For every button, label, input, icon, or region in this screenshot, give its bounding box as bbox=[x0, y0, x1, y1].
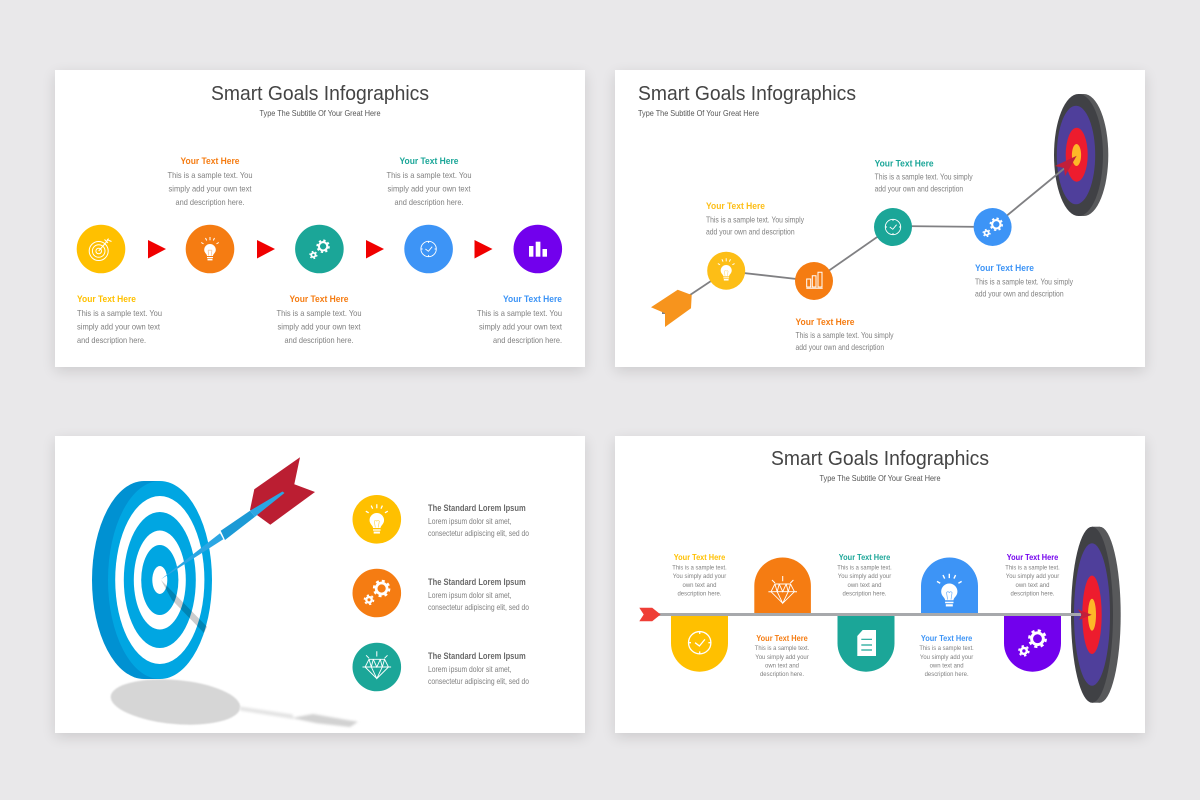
text block: step 1 bbox=[77, 294, 162, 345]
text block: step 5: Your Text Here bbox=[503, 294, 562, 304]
list text 3: Lorem ipsum dolor sit amet, bbox=[428, 665, 512, 674]
text block: blue: This is a sample text. bbox=[919, 645, 974, 652]
text block: step 5 bbox=[477, 294, 563, 345]
text block: item 1: This is a sample text. You simply bbox=[706, 216, 805, 224]
text block: teal: own text and bbox=[848, 582, 882, 589]
text block: purple: Your Text Here bbox=[1007, 553, 1059, 562]
text block: step 4: Your Text Here bbox=[400, 156, 459, 166]
text block: item 3 bbox=[875, 158, 973, 194]
text block: teal: description here. bbox=[842, 590, 887, 597]
text block: blue: own text and bbox=[930, 662, 964, 670]
text block: yellow bbox=[672, 553, 727, 597]
subtitle: Type The Subtitle Of Your Great Here bbox=[638, 109, 759, 118]
text block: step 3: simply add your own text bbox=[278, 322, 361, 332]
text block: blue: Your Text Here bbox=[921, 634, 973, 643]
tab: orange diamond bbox=[754, 557, 811, 614]
text block: teal bbox=[837, 553, 892, 597]
list text 2: consectetur adipiscing elit, sed do bbox=[428, 603, 529, 612]
text block: step 1: simply add your own text bbox=[77, 322, 161, 332]
text block: item 4: This is a sample text. You simply bbox=[975, 277, 1074, 286]
text block: item 2 bbox=[796, 317, 894, 352]
text block: teal: Your Text Here bbox=[839, 553, 891, 562]
blue target board bbox=[92, 481, 212, 679]
text block: purple: You simply add your bbox=[1006, 573, 1060, 580]
title: Smart Goals Infographics bbox=[211, 83, 429, 105]
list text 2: The Standard Lorem Ipsum bbox=[428, 577, 526, 587]
panel: blue target with dart and list bbox=[55, 436, 585, 737]
text block: step 2: This is a sample text. You bbox=[168, 171, 253, 180]
step 5 circle: bar chart icon bbox=[514, 225, 562, 273]
text block: yellow: This is a sample text. bbox=[672, 565, 727, 572]
dart head bbox=[1078, 609, 1092, 620]
text block: item 4: Your Text Here bbox=[975, 263, 1034, 273]
arrow fletching bbox=[651, 290, 692, 327]
text block: purple: own text and bbox=[1016, 582, 1050, 589]
text block: step 2: simply add your own text bbox=[168, 184, 252, 194]
tab: yellow clock bbox=[671, 614, 728, 672]
text block: step 3: Your Text Here bbox=[290, 294, 349, 304]
list text 1: consectetur adipiscing elit, sed do bbox=[428, 529, 529, 538]
text block: step 3: and description here. bbox=[284, 336, 354, 345]
text block: item 3: add your own and description bbox=[875, 185, 964, 194]
arrow fletching bbox=[639, 608, 661, 621]
arrow 3 bbox=[366, 240, 384, 258]
text block: step 1: Your Text Here bbox=[77, 294, 136, 304]
tab: blue bulb bbox=[921, 558, 978, 614]
panel: five step horizontal process bbox=[55, 70, 585, 371]
tab: teal document bbox=[838, 614, 894, 672]
text block: purple bbox=[1005, 553, 1060, 597]
text block: purple: This is a sample text. bbox=[1005, 565, 1060, 572]
text block: item 2: Your Text Here bbox=[796, 317, 855, 327]
list text 3: The Standard Lorem Ipsum bbox=[428, 651, 526, 661]
arrow 4 bbox=[474, 240, 492, 258]
list item 1 icon: bulb bbox=[352, 495, 401, 544]
text block: step 5: This is a sample text. You bbox=[477, 309, 562, 318]
list text 2: Lorem ipsum dolor sit amet, bbox=[428, 591, 512, 600]
text block: step 4 bbox=[386, 156, 472, 207]
subtitle: Type The Subtitle Of Your Great Here bbox=[260, 109, 381, 118]
node 3: clock bbox=[874, 208, 912, 246]
step 2 circle: bulb icon bbox=[186, 225, 234, 273]
text block: step 5: simply add your own text bbox=[479, 322, 563, 332]
list item 2 icon: gears bbox=[352, 569, 401, 617]
text block: item 2: This is a sample text. You simply bbox=[796, 331, 894, 340]
ground shadow of target bbox=[109, 674, 242, 730]
node 2: chart outline bbox=[795, 262, 833, 300]
dart shadow on target bbox=[161, 580, 207, 633]
timeline shaft bbox=[658, 613, 1081, 616]
dart bbox=[161, 457, 315, 579]
list text 1: The Standard Lorem Ipsum bbox=[428, 503, 526, 513]
text block: blue: You simply add your bbox=[920, 654, 974, 661]
text block: step 4: This is a sample text. You bbox=[386, 171, 472, 180]
text block: step 2 bbox=[168, 156, 253, 207]
list text 3: consectetur adipiscing elit, sed do bbox=[428, 677, 529, 686]
arrow 2 bbox=[257, 240, 275, 258]
text block: item 4 bbox=[975, 263, 1074, 298]
text block: step 3 bbox=[276, 294, 362, 345]
text block: blue bbox=[919, 634, 974, 678]
title: Smart Goals Infographics bbox=[771, 448, 989, 470]
arrow path line bbox=[690, 167, 1066, 295]
step 4 circle: clock icon bbox=[404, 225, 453, 273]
text block: orange: description here. bbox=[760, 671, 804, 678]
text block: step 2: Your Text Here bbox=[180, 156, 240, 166]
tab: purple gears bbox=[1004, 614, 1061, 672]
text block: teal: You simply add your bbox=[838, 573, 892, 580]
text block: orange bbox=[755, 634, 809, 678]
text block: item 3: Your Text Here bbox=[875, 158, 934, 168]
text block: step 4: simply add your own text bbox=[388, 184, 471, 194]
text block: item 1: add your own and description bbox=[706, 227, 795, 236]
subtitle: Type The Subtitle Of Your Great Here bbox=[820, 474, 941, 483]
arrow 1 bbox=[148, 240, 166, 258]
text block: yellow: You simply add your bbox=[673, 573, 727, 580]
step 1 circle: target icon bbox=[77, 225, 125, 273]
text block: orange: Your Text Here bbox=[756, 634, 808, 643]
panel: rising arrow path to target bbox=[615, 70, 1145, 371]
text block: step 4: and description here. bbox=[394, 198, 464, 207]
panel: horizontal arrow timeline with tabs bbox=[615, 436, 1145, 737]
text block: item 1: Your Text Here bbox=[706, 201, 765, 211]
text block: purple: description here. bbox=[1010, 590, 1055, 597]
text block: step 5: and description here. bbox=[493, 336, 562, 345]
text block: orange: This is a sample text. bbox=[755, 645, 809, 652]
text block: item 2: add your own and description bbox=[796, 343, 884, 352]
text block: teal: This is a sample text. bbox=[837, 565, 892, 572]
target board bbox=[1054, 94, 1108, 216]
text block: step 3: This is a sample text. You bbox=[276, 309, 362, 318]
node 4: gears bbox=[974, 208, 1012, 246]
text block: step 1: This is a sample text. You bbox=[77, 309, 162, 318]
text block: step 1: and description here. bbox=[77, 336, 146, 345]
text block: step 2: and description here. bbox=[176, 198, 244, 207]
arrow stub bbox=[662, 312, 666, 314]
text block: item 3: This is a sample text. You simply bbox=[875, 173, 973, 182]
text block: yellow: description here. bbox=[678, 590, 722, 597]
step 3 circle: gears icon bbox=[295, 225, 344, 273]
list text 1: Lorem ipsum dolor sit amet, bbox=[428, 517, 512, 526]
text block: yellow: own text and bbox=[682, 582, 717, 589]
text block: blue: description here. bbox=[925, 671, 969, 678]
node 1: bulb bbox=[707, 252, 745, 290]
list text 3 bbox=[428, 651, 529, 686]
text block: orange: own text and bbox=[765, 662, 799, 670]
text block: item 4: add your own and description bbox=[975, 289, 1064, 298]
list text 2 bbox=[428, 577, 529, 612]
text block: yellow: Your Text Here bbox=[674, 553, 726, 562]
list text 1 bbox=[428, 503, 529, 538]
target board bbox=[1071, 527, 1121, 703]
text block: orange: You simply add your bbox=[755, 654, 809, 661]
title: Smart Goals Infographics bbox=[638, 83, 856, 105]
dart head bbox=[1055, 156, 1077, 176]
list item 3 icon: diamond bbox=[352, 643, 401, 691]
text block: item 1 bbox=[706, 201, 805, 236]
ground shadow of dart bbox=[240, 706, 358, 727]
